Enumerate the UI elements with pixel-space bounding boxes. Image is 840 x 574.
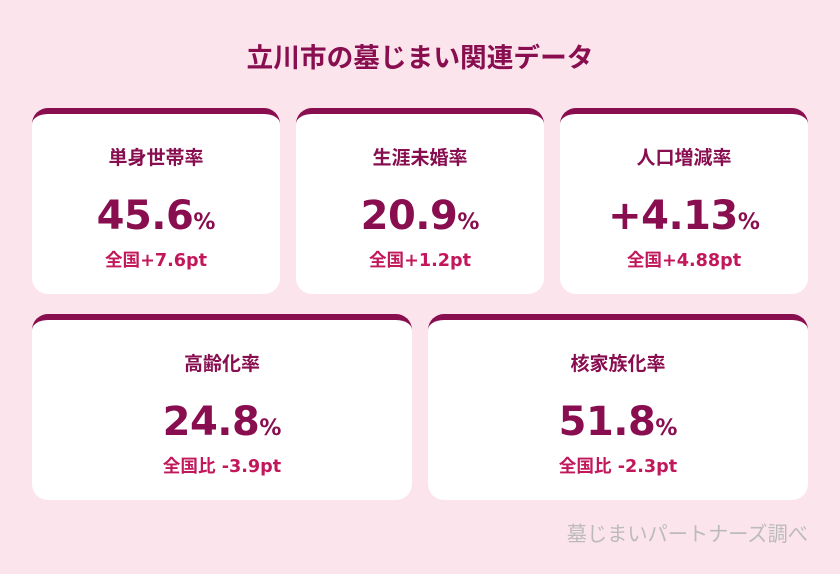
value: 51.8%: [559, 399, 677, 445]
label: 核家族化率: [570, 353, 666, 375]
comparison: 全国+1.2pt: [369, 251, 471, 271]
panel: lifetime unmarried rate: [296, 108, 544, 294]
comparison: 全国比 -2.3pt: [559, 457, 677, 477]
label: 単身世帯率: [108, 147, 204, 169]
panel: population growth rate: [560, 108, 808, 294]
value: 24.8%: [163, 399, 281, 445]
title: 立川市の墓じまい関連データ: [247, 43, 593, 74]
source note: 墓じまいパートナーズ調べ: [567, 522, 808, 546]
value: 20.9%: [361, 193, 479, 239]
value: +4.13%: [608, 193, 760, 239]
panel: single-person households: [32, 108, 280, 294]
comparison: 全国比 -3.9pt: [163, 457, 281, 477]
label: 生涯未婚率: [372, 147, 468, 169]
panel: nuclear family rate: [428, 314, 808, 500]
panel: aging rate: [32, 314, 412, 500]
label: 人口増減率: [636, 147, 732, 169]
label: 高齢化率: [184, 353, 260, 375]
comparison: 全国+4.88pt: [627, 251, 741, 271]
value: 45.6%: [97, 193, 215, 239]
comparison: 全国+7.6pt: [105, 251, 207, 271]
